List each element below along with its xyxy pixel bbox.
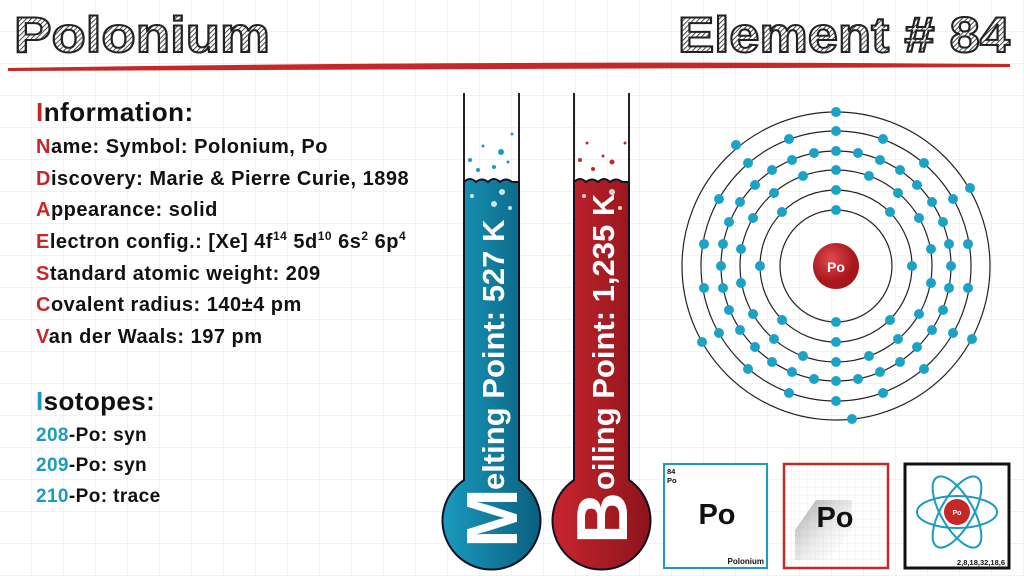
- information block: Appearance: solid: [36, 199, 218, 221]
- card: atom icon: Po: [953, 510, 961, 517]
- information block: 14: [273, 229, 287, 243]
- isotopes block: 210-Po: trace: [36, 486, 161, 507]
- thermometer: boiling point: B: [563, 492, 643, 544]
- red underline stroke: [8, 63, 1010, 71]
- thermometer: boiling point: oiling Point: 1,235 K: [586, 193, 621, 490]
- card: periodic tile: 84: [667, 467, 676, 476]
- isotopes block: 209-Po: syn: [36, 455, 147, 476]
- card: periodic tile: [664, 464, 767, 568]
- information block: 5d: [287, 231, 318, 253]
- card: atom icon: [905, 464, 1009, 568]
- title: Polonium: [14, 7, 270, 63]
- card: atom icon: 2,8,18,32,18,6: [957, 558, 1005, 567]
- card: periodic tile: Po: [698, 499, 736, 531]
- isotopes block: 208-Po: syn: [36, 425, 147, 446]
- isotopes block: [36, 386, 161, 507]
- information block: Covalent radius: 140±4 pm: [36, 294, 302, 316]
- information block: 6p: [369, 231, 399, 253]
- information block: Discovery: Marie & Pierre Curie, 1898: [36, 168, 409, 190]
- atom diagram: [682, 107, 990, 424]
- information block: 4: [399, 229, 406, 243]
- card: long shadow: Po: [816, 502, 854, 534]
- atom diagram: Po: [827, 259, 845, 275]
- information block: Standard atomic weight: 209: [36, 263, 321, 285]
- information block: 6s: [332, 231, 361, 253]
- thermometer: melting point: elting Point: 527 K: [476, 219, 511, 490]
- information block: Van der Waals: 197 pm: [36, 326, 263, 348]
- thermometer: melting point: [443, 93, 540, 570]
- isotopes block: Isotopes:: [36, 386, 155, 416]
- information block: [36, 97, 409, 348]
- thermometer: boiling point: [553, 93, 650, 570]
- card: periodic tile: Polonium: [728, 557, 764, 566]
- information block: Electron config.: [Xe] 4f: [36, 231, 273, 253]
- information block: Information:: [36, 97, 194, 127]
- card: periodic tile: Po: [667, 476, 677, 485]
- information block: 10: [318, 229, 332, 243]
- information block: 2: [361, 229, 369, 243]
- information block: Name: Symbol: Polonium, Po: [36, 136, 328, 158]
- thermometer: melting point: M: [453, 488, 533, 548]
- card: long shadow: [784, 464, 888, 568]
- element number heading: Element # 84: [678, 7, 1010, 63]
